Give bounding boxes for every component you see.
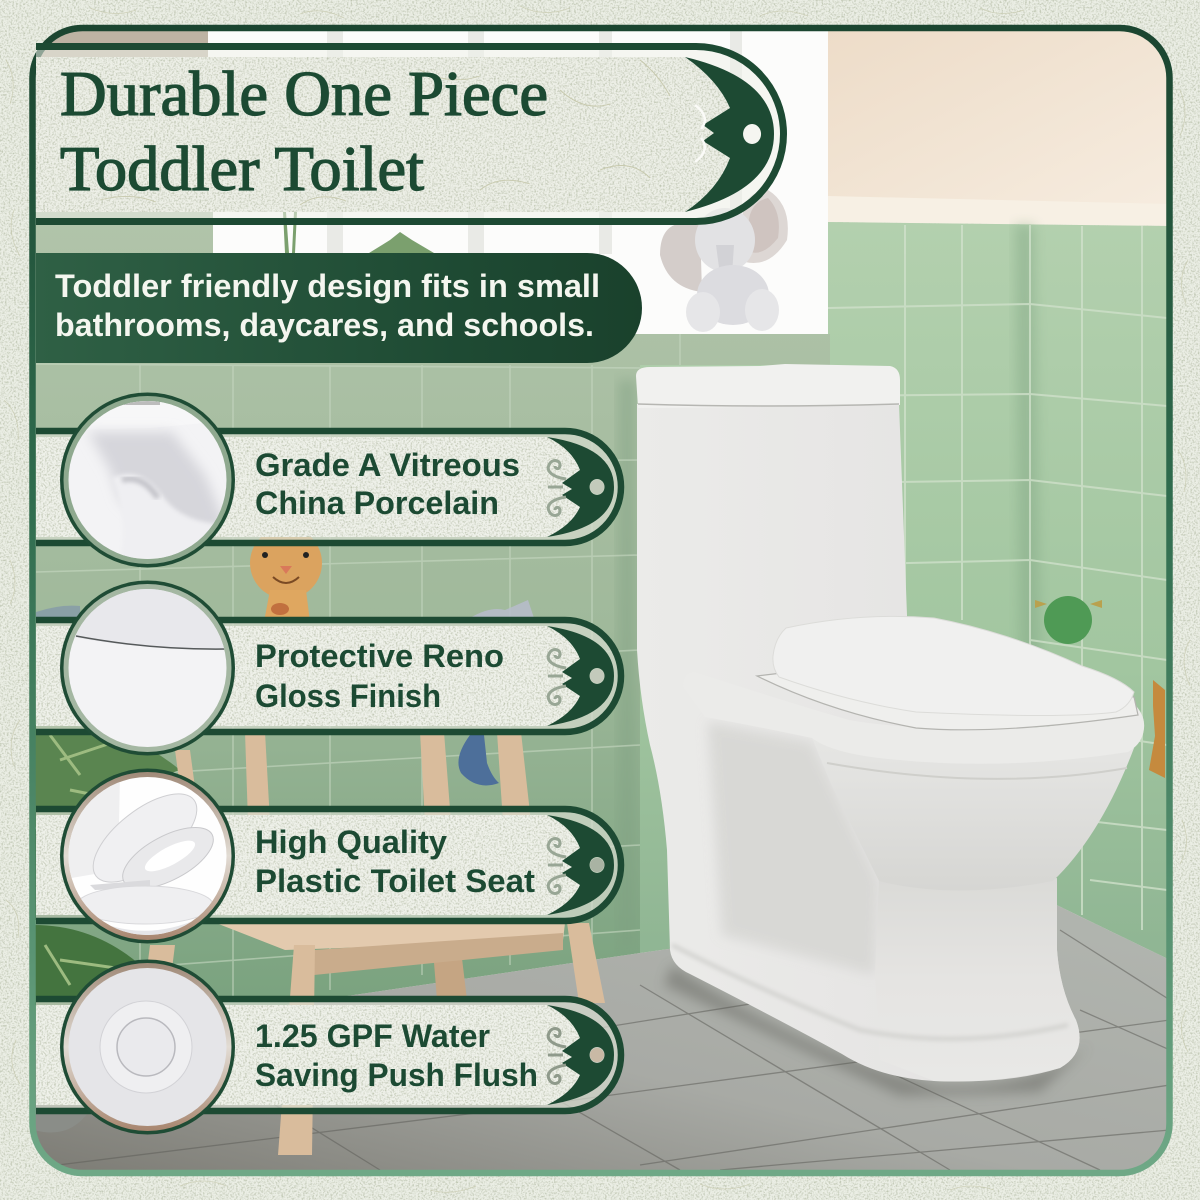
bar text: Gloss Finish [255,678,441,714]
floor tile lines [34,930,1170,1170]
bar hole [590,669,604,683]
chair rail [828,196,1170,226]
decal: blue cat [458,735,499,785]
bar interior tint [36,999,621,1111]
bar swirl ornament [548,461,566,515]
bowl rim [935,706,1144,763]
banner fibres [100,60,670,205]
banner crescent with hole [685,57,774,212]
flush button image [60,960,236,1134]
bar text: China Porcelain [255,485,499,521]
plinth line [672,945,1068,1039]
feature bar 4 [36,999,621,1111]
bar paper [36,437,580,537]
bar hole [590,1048,604,1062]
banner interior tint [36,46,784,222]
feature bar 1 [36,431,621,543]
bar ring [36,999,621,1111]
subtitle text: Toddler friendly design fits in small [55,268,600,304]
decal: zebra [470,600,534,618]
title banner [36,46,784,222]
bar swirl ornament [548,650,566,704]
bar crescent [547,1005,614,1105]
subtitle text [55,268,600,343]
subtitle pill [36,253,642,363]
bar paper [36,815,580,915]
banner swirl [695,105,705,162]
bar text: Protective Reno [255,638,504,674]
title text: Durable One Piece [60,59,548,129]
bar text: High Quality [255,824,447,860]
toilet shadow on floor [664,965,1090,1096]
bar text [255,1018,538,1093]
toilet lid [773,616,1134,716]
wooden stool [145,732,605,1155]
feature bar 3 [36,809,621,921]
subtitle text: bathrooms, daycares, and schools. [55,307,594,343]
bar ring [36,431,621,543]
title text [60,59,548,204]
circle photo: flush button [60,960,236,1134]
bar swirl ornament [548,839,566,893]
bar crescent [547,815,614,915]
bar ring [36,809,621,921]
bar interior tint [36,620,621,732]
bar paper [36,626,580,726]
elephant plush [660,190,788,332]
bowl interior image [68,401,226,559]
pedestal front [875,878,1080,1081]
window [34,30,828,334]
wall corner shade [1012,220,1040,648]
decal: left creature edge [36,606,80,618]
circle photo: gloss finish [60,580,236,756]
bar paper [36,1005,580,1105]
tank lid [636,364,900,408]
bowl [851,748,1134,886]
bar hole [590,480,604,494]
title text: Toddler Toilet [60,134,425,204]
gloss surface image [68,589,226,747]
right wall grout lines [828,225,1167,930]
feature bar 2 [36,620,621,732]
bar crescent [547,626,614,726]
bar interior tint [36,809,621,921]
banner ring [36,46,784,222]
floor [34,897,1170,1175]
rim groove [827,763,1127,779]
banner paper [36,57,730,212]
right green tile wall [640,222,1170,960]
bar interior tint [36,431,621,543]
toilet [636,364,1144,1096]
seat lower ring [757,672,1138,730]
plant leaves [34,725,180,1132]
beige upper wall [820,30,1170,210]
left green tile wall [34,212,830,1042]
bar crescent [547,437,614,537]
shadow under shelf [708,722,879,975]
bar text [255,824,535,899]
wall tile grout lines [36,334,680,1000]
bar text [255,638,504,714]
plant on sill [283,212,434,253]
tank and pedestal body [637,404,1080,1081]
bar text: Grade A Vitreous [255,447,520,483]
decal: giraffe [250,537,322,617]
circle photo: toilet seat [60,768,236,950]
bar text [255,447,520,521]
seat image [68,777,226,935]
decal: green elephant [1035,596,1102,644]
decal: deer [1149,680,1165,778]
bar ring [36,620,621,732]
bar text: Plastic Toilet Seat [255,863,535,899]
bar text: Saving Push Flush [255,1057,538,1093]
bar hole [590,858,604,872]
bar swirl ornament [548,1029,566,1083]
bar text: 1.25 GPF Water [255,1018,490,1054]
shade beside toilet [616,380,637,764]
circle photo: toilet bowl interior [60,392,236,568]
